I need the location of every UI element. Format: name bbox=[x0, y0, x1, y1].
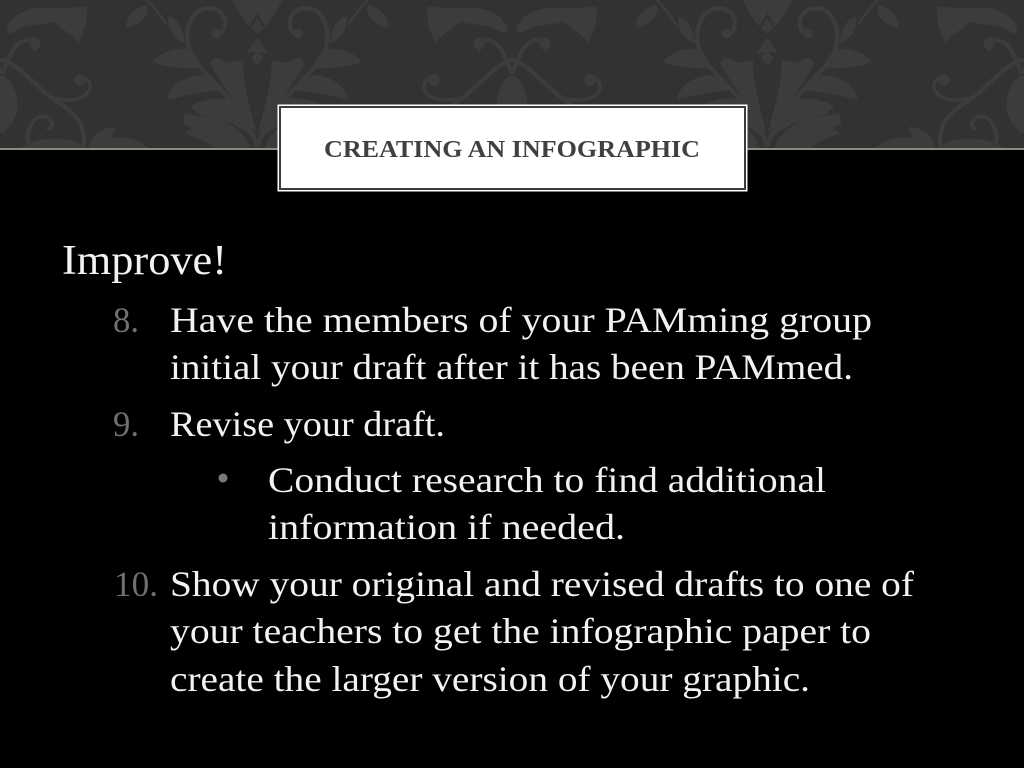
list item 10: Show your original and revised drafts to one of bbox=[170, 564, 914, 604]
sub-bullet: conduct research: Conduct research to find additional bbox=[268, 460, 826, 500]
list item 10: create the larger version of your graphic. bbox=[170, 659, 810, 699]
list item 8: initial your draft after it has been PAMmed. bbox=[170, 347, 853, 387]
list item 8: 8. bbox=[113, 300, 139, 340]
list item 10 bbox=[114, 564, 914, 699]
heading: Improve!: Improve! bbox=[62, 238, 227, 284]
title text: CREATING AN INFOGRAPHIC bbox=[324, 137, 700, 163]
list item 8: Have the members of your PAMming group bbox=[170, 300, 872, 340]
list item 8 bbox=[113, 300, 872, 387]
list item 10: 10. bbox=[114, 564, 158, 604]
list item 9: Revise your draft. bbox=[170, 404, 445, 444]
sub-bullet: conduct research bbox=[218, 460, 826, 547]
header damask band bbox=[0, 0, 1024, 148]
list item 9: 9. bbox=[113, 404, 139, 444]
list item 10: your teachers to get the infographic paper to bbox=[170, 611, 871, 651]
title box bbox=[278, 104, 748, 192]
sub-bullet: conduct research: information if needed. bbox=[268, 507, 625, 547]
